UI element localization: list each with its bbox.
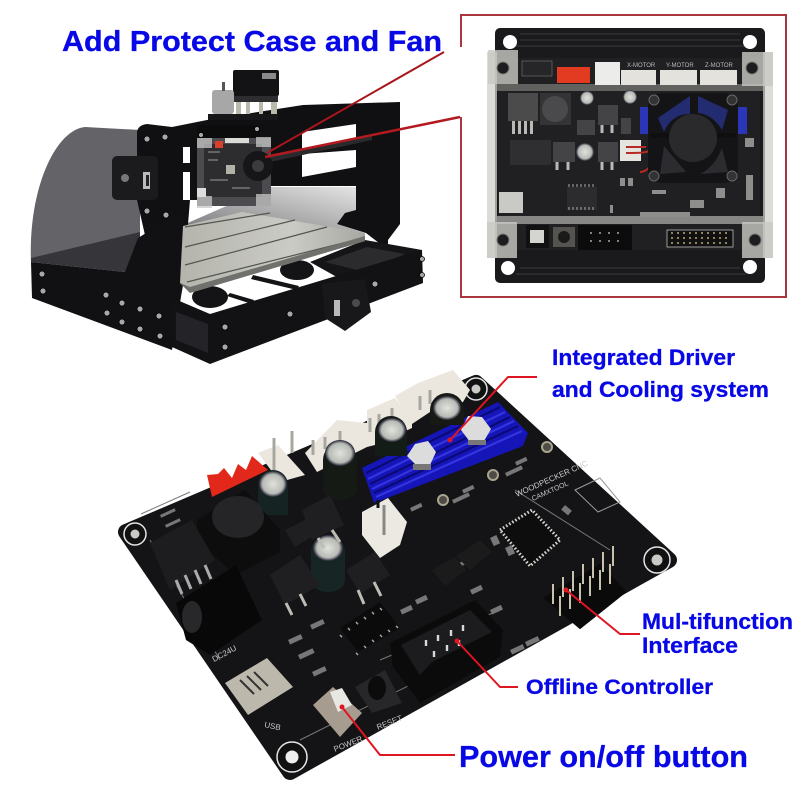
board labels: POWER: [332, 734, 364, 754]
mosfets: [553, 105, 631, 162]
heatsink: [362, 402, 528, 503]
left stepper motor: [112, 156, 158, 200]
IDC offline header: [390, 600, 503, 703]
mosfet legs: [286, 530, 381, 615]
title: Add Protect Case and Fan: [62, 26, 442, 58]
callout line: driver: [450, 377, 537, 440]
callout line: power: [342, 707, 455, 755]
switch: [526, 225, 549, 248]
motor labels: Z-MOTOR: [705, 63, 734, 69]
front beam slot: [176, 312, 208, 353]
brand silk text: WOODPECKER CNC: [514, 459, 589, 499]
PCB under acrylic: [498, 58, 760, 250]
white connector small: [595, 62, 620, 85]
small SOIC chips: [432, 540, 492, 586]
gantry small slots: [183, 147, 190, 200]
top stepper motor: [233, 70, 279, 116]
gantry frame: [137, 102, 400, 345]
open gap behind the bed: [183, 187, 365, 233]
callout dot: offline controller: [454, 638, 460, 644]
case screws: [497, 62, 761, 246]
reset button: [553, 227, 575, 247]
small SMD parts: [610, 138, 754, 217]
large chip U2: [340, 602, 400, 655]
DC24U label: DC24U: [211, 643, 238, 664]
controller board: [124, 370, 670, 772]
chip legs: [569, 184, 593, 210]
rear base rails: [310, 240, 422, 290]
motor labels: Y-MOTOR: [666, 63, 694, 69]
board labels: [264, 713, 404, 754]
mounting holes: [501, 35, 757, 275]
rail window: [325, 247, 405, 272]
inductor: [540, 93, 571, 125]
gantry lower window: [302, 150, 356, 177]
callout line: panel to machine: [265, 117, 460, 157]
capacitors: [258, 393, 464, 592]
machine frame screws: [39, 126, 424, 350]
trim pots: [438, 442, 552, 505]
black mount plate: [197, 125, 260, 140]
PCB: [126, 383, 669, 772]
multi-function pin header: [545, 546, 625, 628]
acrylic top band: [497, 84, 763, 91]
label: interface: Interface: [642, 633, 738, 658]
mounting holes: [124, 378, 670, 772]
capacitors: [576, 90, 637, 161]
gantry upper window: [302, 124, 356, 150]
motor labels: X-MOTOR: [627, 63, 656, 69]
cooling fan: [648, 93, 738, 183]
left side plate: [31, 210, 183, 350]
callout line: interface: [566, 590, 640, 634]
acrylic side strips: [487, 52, 773, 258]
main MCU chip: [500, 510, 560, 566]
label: power button: Power on/off button: [459, 739, 748, 774]
inductor: [197, 490, 280, 575]
nylon posts: [407, 416, 491, 470]
white fan connector: [362, 498, 407, 558]
black rollers under the bed: [192, 260, 314, 308]
DC jack: [176, 565, 262, 655]
reset button: [355, 670, 402, 713]
white connector row: [258, 370, 470, 482]
motor connectors: [621, 70, 737, 85]
fan connector and wires: [620, 140, 654, 172]
DC jack: [510, 140, 551, 165]
red power connector: [557, 67, 590, 83]
pin box: [575, 478, 620, 512]
main chip: [567, 187, 597, 210]
reflective base: [31, 232, 140, 272]
regulator: [508, 93, 538, 134]
acrylic back sheet: [31, 127, 140, 262]
pin header: [667, 230, 733, 247]
front beam: [170, 250, 423, 364]
callout dot: interface: [564, 588, 568, 592]
label: integrated driver: Integrated Driver: [552, 345, 735, 370]
callout line: offline controller: [457, 641, 518, 687]
label: cooling system: and Cooling system: [552, 377, 769, 402]
USB port: [225, 658, 293, 715]
label: multi-function: Mul-tifunction: [642, 609, 793, 634]
board labels: RESET: [375, 713, 404, 732]
CNC machine illustration: [31, 70, 424, 364]
motor labels: [627, 63, 734, 69]
callout dot: power: [340, 704, 344, 710]
heatsink edges: [640, 107, 747, 134]
connector pins: [274, 390, 430, 470]
brand silk text: CAMXTOOL: [531, 480, 570, 503]
base texture: [516, 34, 746, 274]
label: offline controller: Offline Controller: [526, 676, 713, 699]
USB port: [499, 192, 523, 213]
acrylic bottom band: [497, 216, 763, 224]
board labels: USB: [264, 720, 282, 732]
spindle terminal block: [522, 61, 552, 76]
power switch: [313, 687, 362, 737]
spindle motor: [208, 82, 278, 120]
silk outline traces: [141, 490, 610, 740]
SMD components: [160, 457, 572, 677]
IDC header: [578, 225, 632, 250]
callout line: title to machine: [267, 52, 444, 153]
aluminium bed: [180, 212, 365, 293]
red power connector: [207, 456, 268, 497]
mosfet legs: [557, 125, 612, 170]
black 3D printed base: [495, 28, 765, 283]
gantry rod: [270, 136, 372, 162]
regulator: [150, 520, 215, 594]
mosfets: [270, 495, 390, 605]
callout dot: driver: [448, 438, 452, 442]
front stepper motor: [322, 279, 371, 331]
clear corner blocks: [487, 50, 773, 258]
clear control case on machine: [197, 137, 273, 208]
inset panel: cased controller: [461, 15, 786, 297]
inset border: [461, 15, 786, 297]
